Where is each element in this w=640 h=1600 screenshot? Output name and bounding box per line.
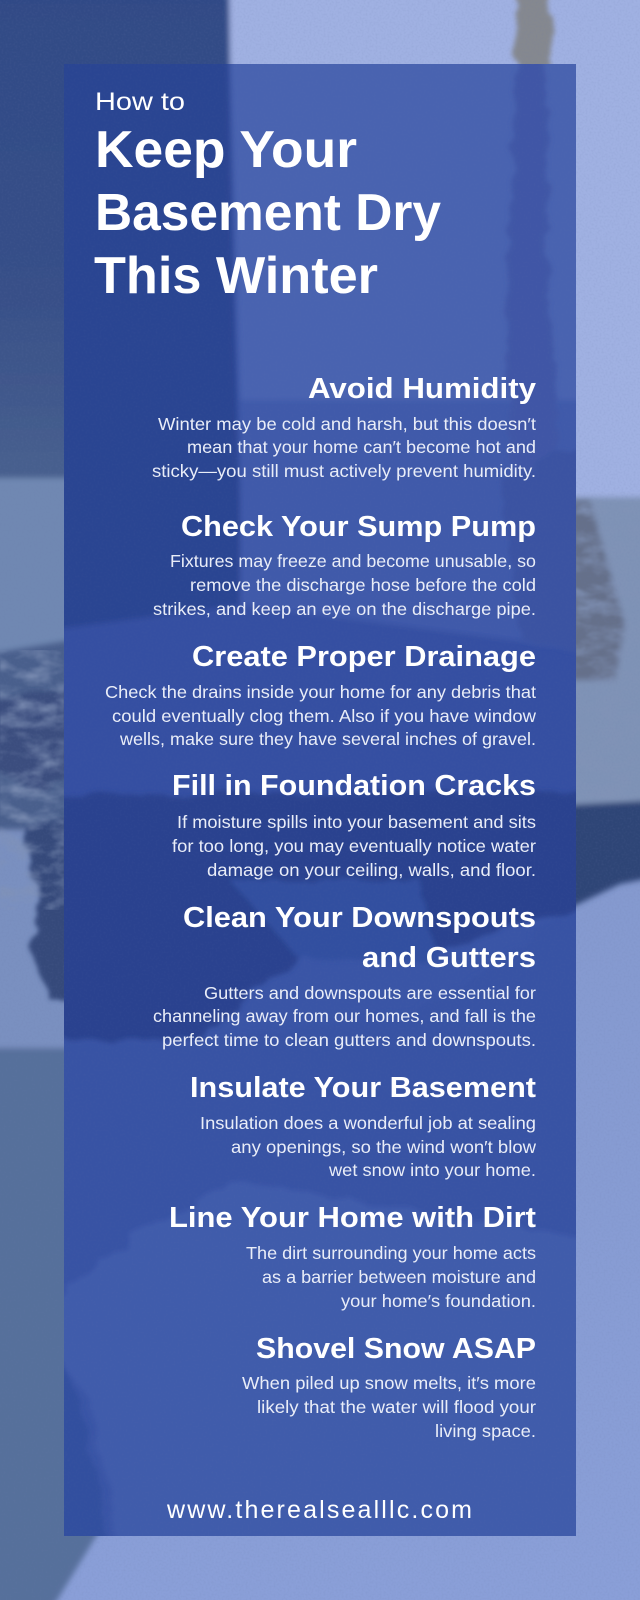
section: Fill in Foundation Cracks: Fill in Foundation Cracks: [172, 770, 536, 802]
section: Insulate Your Basement: wet snow into your home.: [328, 1160, 536, 1180]
section: Check Your Sump Pump: Check Your Sump Pump: [181, 511, 536, 543]
section: Clean Your Downspouts and Gutters: channeling away from our homes, and fall is the: [153, 1006, 536, 1026]
website URL: www.therealsealllc.com: [166, 1496, 472, 1524]
section: Insulate Your Basement: [190, 1072, 536, 1180]
section: Avoid Humidity: Avoid Humidity: [308, 373, 536, 405]
section: Shovel Snow ASAP: When piled up snow melts, it′s more: [242, 1373, 536, 1393]
section: Clean Your Downspouts and Gutters: perfect time to clean gutters and downspouts.: [162, 1030, 536, 1050]
section: Clean Your Downspouts and Gutters: Gutters and downspouts are essential for: [204, 983, 536, 1003]
section: Fill in Foundation Cracks: damage on your ceiling, walls, and floor.: [207, 860, 536, 880]
section: Check Your Sump Pump: [153, 511, 536, 619]
section: Create Proper Drainage: Check the drains inside your home for any debris that: [105, 682, 536, 702]
section: Check Your Sump Pump: Fixtures may freeze and become unusable, so: [170, 551, 536, 571]
section: Avoid Humidity: mean that your home can′t become hot and: [187, 437, 536, 457]
section: Check Your Sump Pump: remove the discharge hose before the cold: [190, 575, 536, 595]
panel: blue content panel: [50, 50, 590, 1550]
section: Shovel Snow ASAP: likely that the water will flood your: [257, 1397, 536, 1417]
section: Create Proper Drainage: Create Proper Drainage: [192, 641, 536, 673]
title: Keep Your: [95, 121, 357, 179]
section: Fill in Foundation Cracks: for too long, you may eventually notice water: [172, 836, 536, 856]
section: Create Proper Drainage: wells, make sure they have several inches of gravel.: [119, 729, 536, 749]
section: Create Proper Drainage: [105, 641, 536, 749]
section: Line Your Home with Dirt: [169, 1202, 536, 1311]
section: Line Your Home with Dirt: as a barrier between moisture and: [262, 1267, 536, 1287]
section: Line Your Home with Dirt: your home′s foundation.: [341, 1291, 536, 1311]
title: This Winter: [94, 247, 378, 305]
title: [94, 88, 441, 305]
section: Avoid Humidity: sticky—you still must actively prevent humidity.: [152, 461, 536, 481]
section: Check Your Sump Pump: strikes, and keep an eye on the discharge pipe.: [153, 599, 536, 619]
title: How to: [95, 88, 185, 116]
section: Shovel Snow ASAP: living space.: [435, 1421, 536, 1441]
section: Fill in Foundation Cracks: If moisture spills into your basement and sits: [177, 812, 536, 832]
section: Line Your Home with Dirt: Line Your Home with Dirt: [169, 1202, 536, 1234]
section: Line Your Home with Dirt: The dirt surrounding your home acts: [246, 1243, 536, 1263]
section: Insulate Your Basement: any openings, so the wind won′t blow: [231, 1137, 536, 1157]
section: Avoid Humidity: [152, 373, 536, 481]
section: Create Proper Drainage: could eventually clog them. Also if you have window: [112, 706, 536, 726]
section: Fill in Foundation Cracks: [172, 770, 536, 880]
section: Clean Your Downspouts and Gutters: [153, 902, 536, 1050]
section: Clean Your Downspouts and Gutters: and Gutters: [362, 942, 536, 974]
section: Shovel Snow ASAP: [242, 1333, 536, 1441]
section: Insulate Your Basement: Insulation does a wonderful job at sealing: [200, 1113, 536, 1133]
section: Shovel Snow ASAP: Shovel Snow ASAP: [256, 1333, 536, 1365]
section: Avoid Humidity: Winter may be cold and harsh, but this doesn′t: [158, 414, 536, 434]
section: Insulate Your Basement: Insulate Your Basement: [190, 1072, 536, 1104]
section: Clean Your Downspouts and Gutters: Clean Your Downspouts: [183, 902, 536, 934]
title: Basement Dry: [95, 184, 441, 242]
